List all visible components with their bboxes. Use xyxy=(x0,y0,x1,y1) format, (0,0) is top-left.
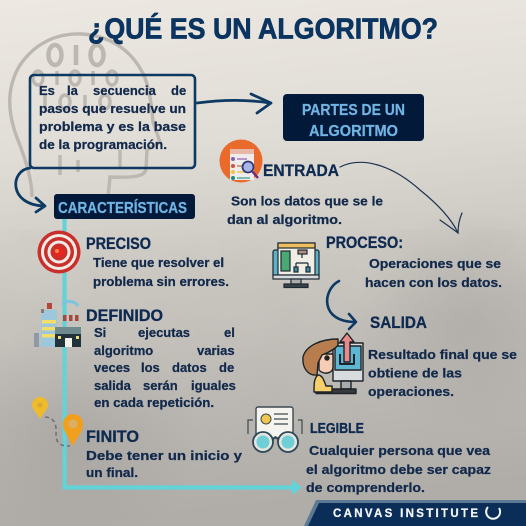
heading: partes de un algoritmo: PARTES DE UN xyxy=(302,102,405,119)
definition box: problema y es la base xyxy=(39,119,186,134)
item: legible: LEGIBLE xyxy=(310,421,364,437)
item: legible: el algoritmo debe ser capaz xyxy=(306,462,492,477)
arrow: proceso to salida xyxy=(327,281,356,329)
arrow: definition to caracteristicas xyxy=(16,168,45,212)
item: definido: salida xyxy=(94,378,132,393)
definition box: de la programación. xyxy=(39,137,167,152)
title: ¿QUÉ ES UN ALGORITMO? xyxy=(88,14,438,46)
icon: location pins xyxy=(32,397,83,446)
definition box: pasos que resuelve un xyxy=(39,101,186,116)
item: definido: de xyxy=(219,360,234,375)
item: finito: un final. xyxy=(86,465,138,480)
item: salida: operaciones. xyxy=(368,384,454,399)
definition box: de xyxy=(171,83,186,98)
icon: legible glasses with document xyxy=(248,407,302,452)
watermark: head with binary digits xyxy=(10,34,160,197)
item: salida: obtiene de las xyxy=(368,366,462,380)
item: preciso: PRECISO xyxy=(86,235,151,253)
item: definido: los xyxy=(141,360,160,375)
item: finito: Debe tener un inicio y xyxy=(86,448,243,463)
item: definido: Si xyxy=(94,325,106,340)
item: proceso: Operaciones que se xyxy=(369,256,501,271)
item: proceso xyxy=(326,234,502,290)
item: entrada: dan al algoritmo. xyxy=(227,212,342,227)
definition box xyxy=(30,75,195,168)
heading: partes de un algoritmo xyxy=(283,94,424,141)
heading: caracteristicas: CARACTERÍSTICAS xyxy=(58,200,187,217)
item: entrada: ENTRADA xyxy=(263,162,339,180)
item: definido: iguales xyxy=(191,378,236,393)
definition box: la xyxy=(67,83,79,98)
item: salida xyxy=(368,314,517,399)
item: definido: el xyxy=(224,325,235,340)
item: definido: varias xyxy=(197,343,235,358)
icon: factory xyxy=(34,301,81,347)
item: definido: datos xyxy=(172,360,207,375)
item: finito: FINITO xyxy=(86,428,139,446)
item: preciso: problema sin errores. xyxy=(93,274,229,289)
footer band: canvas institute xyxy=(304,500,526,526)
item: preciso xyxy=(86,235,229,289)
item: legible xyxy=(306,421,492,495)
icon: entrada document with magnifier xyxy=(220,140,262,182)
arrow: entrada to proceso xyxy=(340,162,462,233)
item: legible: de comprenderlo. xyxy=(306,480,425,495)
item: definido: algoritmo xyxy=(94,343,153,358)
item: entrada: Son los datos que se le xyxy=(231,194,383,208)
item: definido: DEFINIDO xyxy=(86,307,163,325)
item: definido: ejecutas xyxy=(138,325,190,340)
heading: caracteristicas xyxy=(54,194,195,219)
icon: salida person at computer xyxy=(303,333,363,394)
item: proceso: PROCESO: xyxy=(326,234,403,252)
item: definido xyxy=(86,307,236,410)
heading: partes de un algoritmo: ALGORITMO xyxy=(309,123,398,140)
item: entrada xyxy=(227,162,383,227)
icon: target xyxy=(38,230,80,274)
item: definido: en cada repetición. xyxy=(94,395,214,410)
footer band: canvas institute: CANVAS INSTITUTE xyxy=(333,508,478,520)
item: salida: SALIDA xyxy=(370,314,427,332)
timeline line with arrow xyxy=(64,219,302,495)
item: salida: Resultado final que se xyxy=(368,347,517,362)
item: legible: Cualquier persona que vea xyxy=(309,443,491,458)
item: preciso: Tiene que resolver el xyxy=(93,255,224,270)
definition box: Es xyxy=(39,83,55,98)
definition box: secuencia xyxy=(93,83,157,98)
icon: proceso monitor xyxy=(273,243,319,288)
item: proceso: hacen con los datos. xyxy=(365,275,502,290)
item: definido: serán xyxy=(143,378,178,393)
arrow: definition to partes xyxy=(197,94,271,113)
item: definido: veces xyxy=(94,360,130,375)
item: finito xyxy=(86,428,243,480)
